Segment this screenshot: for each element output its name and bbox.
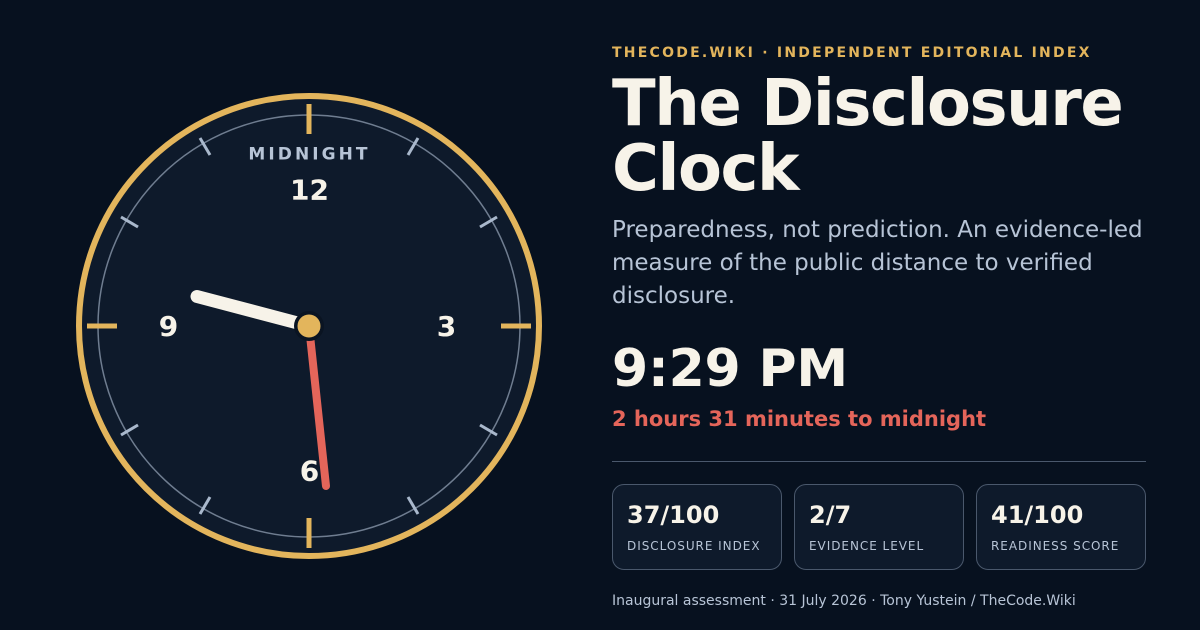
subtitle: Preparedness, not prediction. An evidence-led [612, 217, 1143, 243]
hour numerals: 9 [159, 310, 178, 343]
hour numerals: 3 [437, 310, 456, 343]
card: disclosure index: 37/100 [627, 501, 719, 529]
card: evidence level [794, 484, 964, 570]
hour hand [197, 296, 309, 326]
subtitle: disclosure. [612, 283, 735, 309]
card: readiness score: READINESS SCORE [991, 539, 1119, 553]
midnight label: MIDNIGHT [248, 144, 371, 164]
card: disclosure index: DISCLOSURE INDEX [627, 539, 761, 553]
major tick marks [87, 104, 531, 548]
minute hand [309, 326, 326, 486]
hour numerals [159, 174, 456, 488]
hour numerals: 12 [290, 174, 329, 206]
card: readiness score: 41/100 [991, 501, 1083, 529]
minor tick marks [121, 138, 497, 514]
divider [612, 461, 1146, 462]
title: The Disclosure [612, 67, 1122, 141]
card: evidence level: EVIDENCE LEVEL [809, 539, 924, 553]
clock [76, 93, 542, 559]
subtitle [612, 217, 1143, 309]
center pin [296, 313, 322, 339]
eyebrow: THECODE.WIKI · INDEPENDENT EDITORIAL INDEX [612, 45, 1092, 61]
hour numerals: 6 [300, 454, 319, 488]
clock face [79, 96, 539, 556]
subtitle: measure of the public distance to verified [612, 250, 1093, 276]
inner ring [98, 115, 520, 537]
card: readiness score [976, 484, 1146, 570]
time: 9:29 PM [612, 339, 848, 399]
card: disclosure index [612, 484, 782, 570]
card: evidence level: 2/7 [809, 501, 851, 529]
title [612, 67, 1122, 206]
title: Clock [612, 132, 798, 206]
countdown: 2 hours 31 minutes to midnight [612, 407, 986, 431]
footer: Inaugural assessment · 31 July 2026 · Tony Yustein / TheCode.Wiki [612, 593, 1076, 609]
